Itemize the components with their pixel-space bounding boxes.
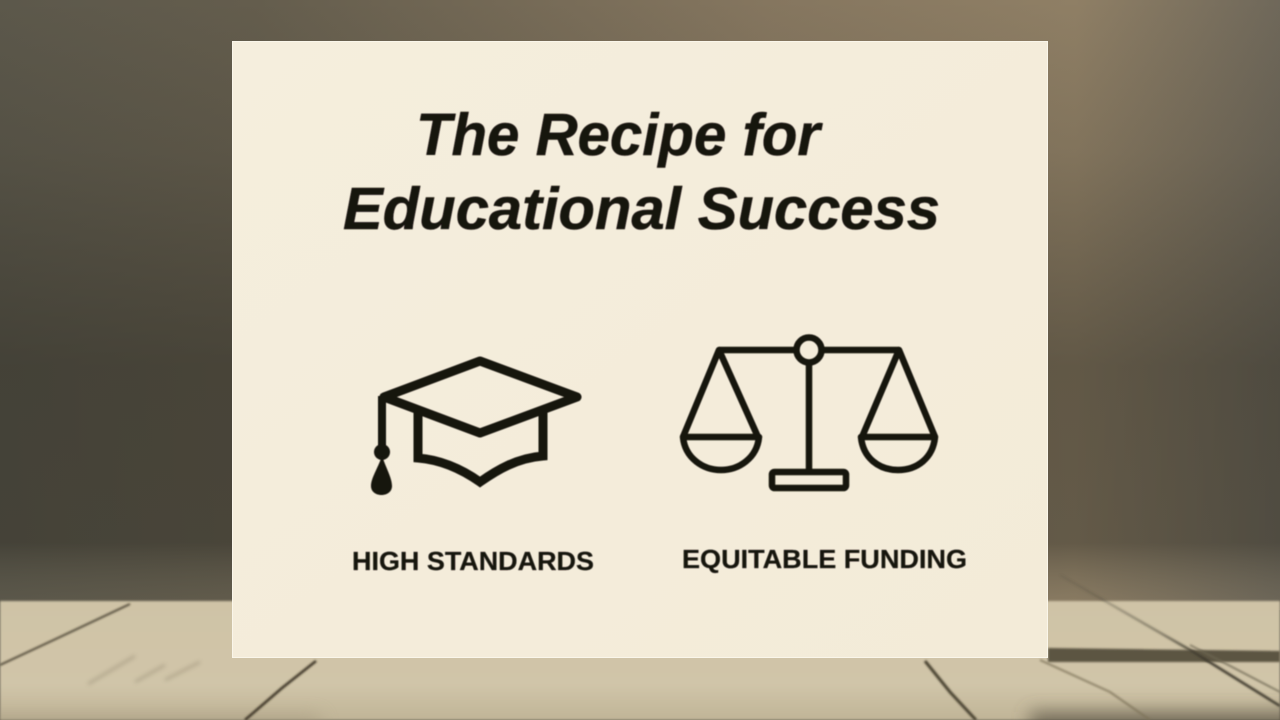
title: Educational Success [343,176,940,242]
panel: paper card [232,42,1048,658]
background: wooden floor [0,601,1280,720]
icon: balance scales [683,338,935,488]
title [343,102,940,242]
floor diagonal seam [1060,575,1280,706]
title: The Recipe for [416,102,823,168]
label: equitable funding: EQUITABLE FUNDING [682,544,967,574]
shadow cast by the card [1048,648,1280,662]
label: high standards: HIGH STANDARDS [352,546,594,576]
icon: graduation cap [371,361,577,495]
